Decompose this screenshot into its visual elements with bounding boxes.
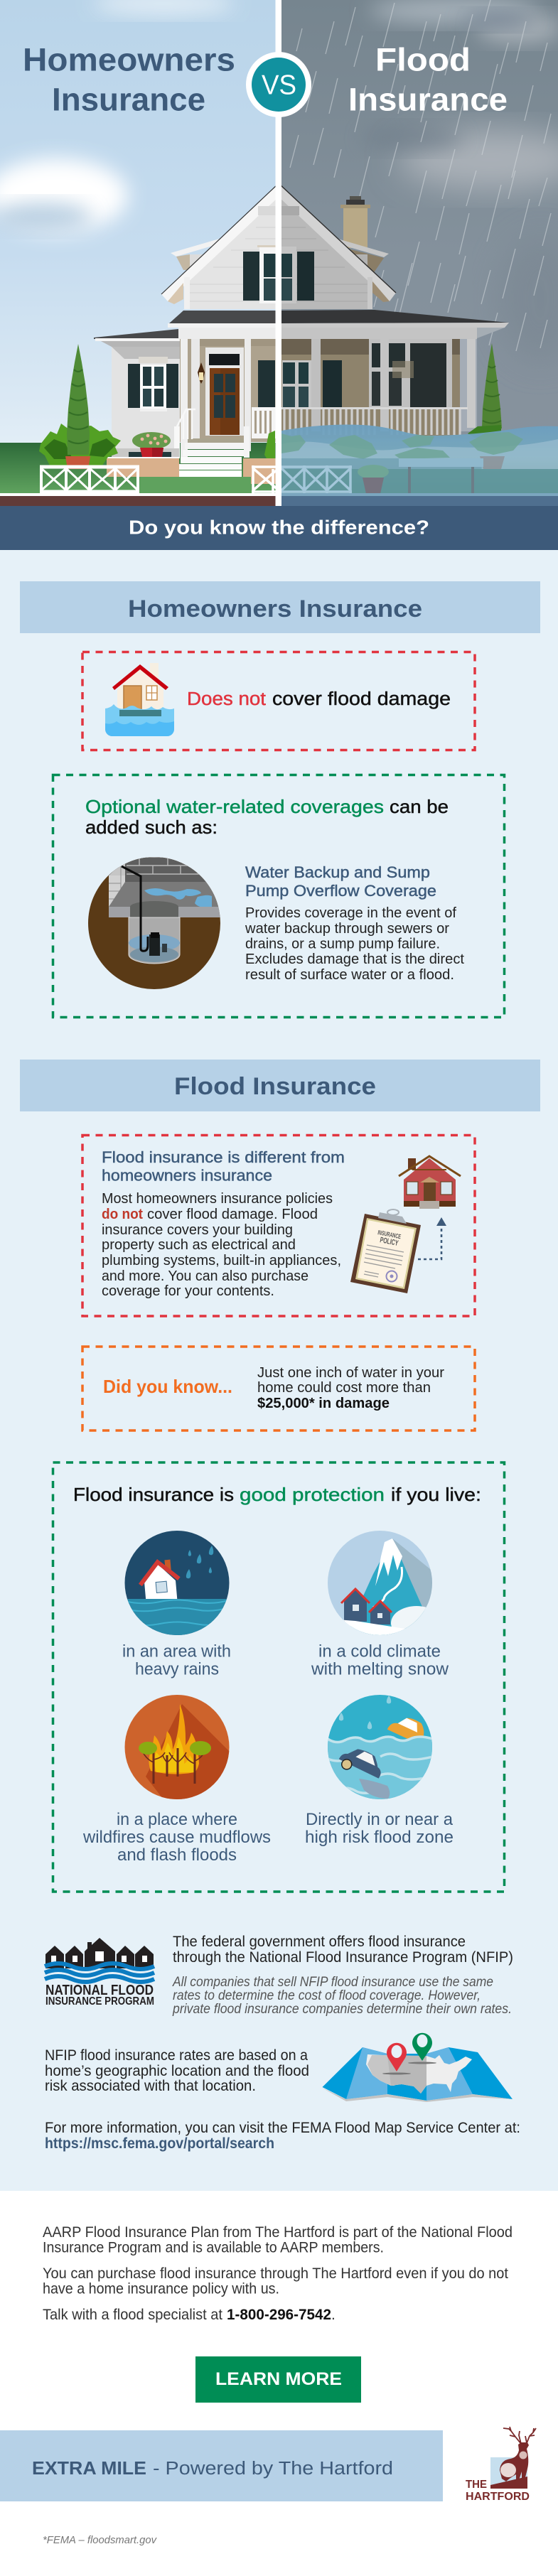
learn more button: LEARN MORE bbox=[215, 2369, 342, 2389]
body copy: do not bbox=[102, 1207, 143, 1222]
coverage description bbox=[245, 905, 464, 983]
footnote: *FEMA – floodsmart.gov bbox=[43, 2534, 157, 2546]
statement text: cover flood damage bbox=[272, 689, 451, 709]
label: melting snow bbox=[311, 1642, 449, 1678]
body copy: coverage for your contents. bbox=[102, 1283, 274, 1299]
rates text bbox=[45, 2047, 309, 2094]
icon: red pin bbox=[387, 2043, 407, 2071]
roof bbox=[169, 311, 279, 323]
heading: can be bbox=[390, 796, 449, 817]
aarp plan text bbox=[43, 2224, 513, 2323]
heading bbox=[85, 796, 449, 838]
rates text: home’s geographic location and the flood bbox=[45, 2062, 309, 2079]
icon: heavy rains bbox=[124, 1531, 231, 1642]
vs badge: VS bbox=[262, 70, 296, 101]
coverage title bbox=[245, 863, 436, 900]
body copy: insurance covers your building bbox=[102, 1222, 293, 1238]
label: wildfires bbox=[82, 1810, 271, 1865]
label: heavy rains bbox=[122, 1642, 231, 1678]
coverage description: drains, or a sump pump failure. bbox=[245, 937, 440, 952]
icon: green pin bbox=[412, 2033, 432, 2061]
submerged pot bbox=[358, 465, 389, 479]
logo: national flood insurance program bbox=[45, 1938, 154, 2008]
right title: Flood bbox=[375, 41, 471, 78]
nfip text: private flood insurance companies determine their own rates. bbox=[172, 2002, 512, 2017]
left title bbox=[23, 41, 235, 118]
arrow: dotted from policy to house bbox=[418, 1217, 446, 1259]
logo: the hartford: THE bbox=[466, 2479, 487, 2491]
panel: optional water-related coverages bbox=[53, 775, 505, 1018]
right title: Insurance bbox=[348, 81, 508, 118]
logo: the hartford: HARTFORD bbox=[466, 2491, 530, 2503]
porch railing bbox=[281, 407, 468, 409]
foundation bbox=[107, 458, 179, 477]
porch wall bbox=[281, 355, 460, 436]
body copy: property such as electrical and bbox=[102, 1237, 296, 1253]
aarp plan text: AARP Flood Insurance Plan from The Hartford is part of the National Flood bbox=[43, 2224, 513, 2241]
map with location pins bbox=[322, 2033, 513, 2102]
heading bbox=[73, 1484, 481, 1505]
hero illustration bbox=[0, 0, 558, 506]
stormy half bbox=[277, 0, 558, 506]
gable wall bbox=[279, 193, 367, 309]
heading: good protection bbox=[240, 1484, 385, 1505]
panel: did you know bbox=[82, 1347, 475, 1430]
logo: the hartford bbox=[466, 2427, 536, 2503]
icon: wildfires bbox=[124, 1694, 230, 1801]
porch bbox=[180, 339, 279, 442]
center divider bbox=[276, 0, 281, 506]
flower pot bbox=[132, 432, 171, 449]
section heading: homeowners insurance bbox=[20, 581, 540, 633]
subtitle banner bbox=[0, 506, 558, 550]
callout fact: Just one inch of water in your bbox=[257, 1365, 444, 1381]
logo: national flood insurance program: INSURANCE PROGRAM bbox=[45, 1995, 154, 2008]
left wing of the house bbox=[101, 341, 180, 347]
heading: Flood insurance is different from bbox=[102, 1148, 345, 1166]
bushes and tree bbox=[39, 424, 121, 465]
coverage description: result of surface water or a flood. bbox=[245, 967, 454, 983]
label: flood zone bbox=[305, 1810, 454, 1847]
body copy bbox=[102, 1191, 341, 1299]
nfip text: The federal government offers flood insurance bbox=[173, 1933, 466, 1950]
section heading: flood insurance bbox=[20, 1060, 540, 1111]
submerged fence bbox=[281, 465, 352, 493]
learn more button bbox=[195, 2356, 361, 2403]
heading: homeowners insurance bbox=[102, 1167, 272, 1184]
body copy: and more. You can also purchase bbox=[102, 1268, 308, 1284]
icon: insurance policy clipboard: INSURANCE bbox=[377, 1229, 402, 1240]
section heading: homeowners insurance: Homeowners Insurance bbox=[128, 596, 422, 623]
big porch window bbox=[369, 339, 452, 407]
callout fact: home could cost more than bbox=[257, 1380, 431, 1396]
label: flood zone: Directly in or near a bbox=[306, 1810, 454, 1829]
nfip text: through the National Flood Insurance Program (NFIP) bbox=[173, 1949, 513, 1966]
icon: melting snow bbox=[328, 1531, 432, 1635]
statement text bbox=[187, 689, 451, 709]
aarp plan text: have a home insurance policy with us. bbox=[43, 2281, 279, 2297]
panel: flood insurance is different bbox=[82, 1136, 475, 1316]
panel: good protection bbox=[53, 1462, 505, 1892]
sunny half bbox=[0, 0, 281, 506]
extra mile bar: EXTRA MILE bbox=[32, 2459, 146, 2479]
callout fact: $25,000* in damage bbox=[257, 1396, 390, 1411]
steps bbox=[185, 443, 244, 449]
statement text: Does not bbox=[187, 689, 266, 709]
heading bbox=[102, 1148, 345, 1184]
icon: sump pump bbox=[88, 857, 220, 989]
left title: Insurance bbox=[52, 81, 205, 118]
aarp plan text: Insurance Program and is available to AARP members. bbox=[43, 2240, 384, 2256]
coverage title: Pump Overflow Coverage bbox=[245, 882, 436, 900]
icon: insurance policy clipboard bbox=[350, 1209, 421, 1293]
footer background bbox=[0, 2191, 558, 2576]
label: wildfires: and flash floods bbox=[117, 1845, 237, 1865]
submerged bench bbox=[399, 458, 483, 467]
fema link text bbox=[45, 2119, 520, 2152]
coverage description: water backup through sewers or bbox=[245, 921, 449, 937]
left title: Homeowners bbox=[23, 41, 235, 78]
chimney bbox=[343, 208, 367, 248]
heading: Optional water-related coverages bbox=[85, 796, 384, 817]
icon: red pin hole bbox=[391, 2045, 402, 2058]
callout label: Did you know... bbox=[103, 1376, 232, 1397]
subtitle banner: Do you know the difference? bbox=[129, 516, 429, 539]
roof bbox=[279, 310, 508, 323]
icon: green pin hole bbox=[417, 2035, 428, 2047]
icon: high risk flood zone bbox=[328, 1694, 433, 1801]
extra mile bar bbox=[0, 2430, 443, 2501]
section heading: flood insurance: Flood Insurance bbox=[174, 1073, 376, 1100]
fema link text: https://msc.fema.gov/portal/search bbox=[45, 2135, 274, 2152]
upper gable bbox=[171, 238, 222, 257]
aarp plan text: 1-800-296-7542 bbox=[227, 2307, 331, 2323]
body copy: cover flood damage. Flood bbox=[147, 1207, 318, 1222]
callout fact bbox=[257, 1365, 444, 1411]
porch railing bbox=[252, 407, 277, 438]
nfip text: All companies that sell NFIP flood insurance use the same bbox=[172, 1975, 493, 1990]
coverage description: Excludes damage that is the direct bbox=[245, 952, 464, 967]
extra mile bar: - Powered by The Hartford bbox=[153, 2459, 393, 2479]
label: heavy rains: in an area with bbox=[122, 1642, 231, 1661]
aarp plan text: Talk with a flood specialist at bbox=[43, 2307, 222, 2323]
rates text: NFIP flood insurance rates are based on a bbox=[45, 2047, 308, 2064]
label: wildfires: in a place where bbox=[117, 1810, 237, 1829]
body copy: plumbing systems, built-in appliances, bbox=[102, 1253, 341, 1268]
heading: added such as: bbox=[85, 817, 218, 838]
fema link text: For more information, you can visit the FEMA Flood Map Service Center at: bbox=[45, 2119, 520, 2136]
coverage description: Provides coverage in the event of bbox=[245, 905, 456, 921]
icon: insurance policy clipboard: POLICY bbox=[379, 1236, 399, 1248]
rain bbox=[281, 0, 551, 351]
label: melting snow: with melting snow bbox=[311, 1660, 449, 1678]
fence bbox=[40, 465, 279, 495]
icon: flooded house bbox=[105, 663, 174, 736]
aarp plan text: . bbox=[331, 2307, 336, 2323]
lantern bbox=[198, 362, 205, 384]
label: wildfires: wildfires cause mudflows bbox=[82, 1828, 271, 1847]
aarp plan text: You can purchase flood insurance through The Hartford even if you do not bbox=[43, 2265, 508, 2282]
panel: does not cover flood damage bbox=[82, 652, 475, 750]
logo: national flood insurance program: NATIONAL FLOOD bbox=[45, 1982, 154, 1998]
label: flood zone: high risk flood zone bbox=[305, 1828, 454, 1847]
flood water bbox=[281, 425, 558, 469]
coverage title: Water Backup and Sump bbox=[245, 863, 430, 881]
rates text: risk associated with that location. bbox=[45, 2077, 256, 2094]
icon: red house bbox=[399, 1156, 461, 1209]
vs badge bbox=[246, 52, 311, 117]
label: heavy rains: heavy rains bbox=[135, 1660, 219, 1678]
back dormer bbox=[338, 239, 389, 257]
right title bbox=[348, 41, 508, 118]
body copy: Most homeowners insurance policies bbox=[102, 1191, 333, 1207]
heading: Flood insurance is bbox=[73, 1484, 234, 1505]
label: melting snow: in a cold climate bbox=[318, 1642, 441, 1661]
nfip text: rates to determine the cost of flood coverage. However, bbox=[173, 1988, 481, 2003]
tree on the right bbox=[482, 343, 502, 429]
nfip text bbox=[172, 1933, 513, 2017]
heading: if you live: bbox=[391, 1484, 481, 1505]
